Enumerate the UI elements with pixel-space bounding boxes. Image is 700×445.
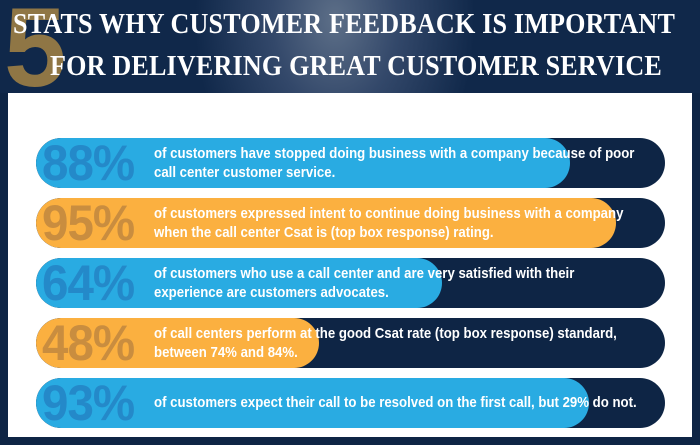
stat bar 95%: of customers expressed intent to continue doing business with a company <box>154 205 623 222</box>
stat bar 64%: of customers who use a call center and are very satisfied with their <box>154 265 574 282</box>
header <box>0 0 700 93</box>
stat bar 95% <box>36 198 665 248</box>
stat bar 93% <box>36 378 665 428</box>
stat bar 88%: call center customer service. <box>154 164 335 181</box>
stat bar 95%: when the call center Csat is (top box response) rating. <box>154 224 494 241</box>
stat bar 88%: of customers have stopped doing business with a company because of poor <box>154 145 634 162</box>
stat bar 48%: between 74% and 84%. <box>154 344 298 361</box>
panel: stats <box>8 93 692 437</box>
title line 1: STATS WHY CUSTOMER FEEDBACK IS IMPORTANT <box>13 8 675 40</box>
stat bar 64%: experience are customers advocates. <box>154 284 389 301</box>
title line 2: FOR DELIVERING GREAT CUSTOMER SERVICE <box>50 50 662 82</box>
stat bar 88% <box>36 138 665 188</box>
stat bar 48% <box>36 318 665 368</box>
stat bar 64% <box>36 258 665 308</box>
stat bar 93%: of customers expect their call to be resolved on the first call, but 29% do not. <box>154 394 637 411</box>
stat bar 48%: of call centers perform at the good Csat rate (top box response) standard, <box>154 325 617 342</box>
